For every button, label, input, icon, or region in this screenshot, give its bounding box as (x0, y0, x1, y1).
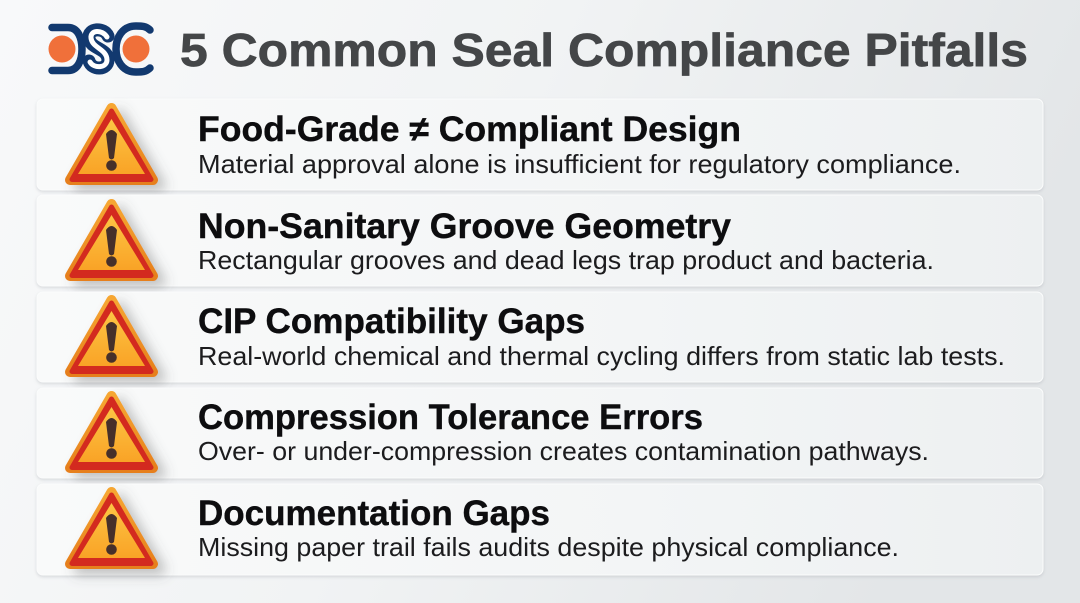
text: pitfall 3 description: Real-world chemical and thermal cycling differs from static lab tests. (198, 341, 1005, 371)
text: pitfall 4 description: Over- or under-compression creates contamination pathways. (198, 436, 929, 466)
icon: warning triangle 3 (70, 300, 153, 372)
heading: pitfall 2: Non-Sanitary Groove Geometry (198, 207, 732, 246)
heading: pitfall 4: Compression Tolerance Errors (198, 398, 703, 437)
text: pitfall 1 description: Material approval alone is insufficient for regulatory compliance. (198, 149, 961, 179)
icon: warning triangle 2 (70, 204, 153, 276)
panel: pitfall 1 (37, 99, 1043, 190)
icon: warning triangle 1 (70, 108, 153, 180)
text: pitfall 2 description: Rectangular grooves and dead legs trap product and bacteria. (198, 245, 934, 275)
text: pitfall 5 description: Missing paper trail fails audits despite physical compliance. (198, 532, 899, 562)
panel: pitfall 5 (37, 484, 1043, 575)
heading: pitfall 3: CIP Compatibility Gaps (198, 302, 585, 341)
title: 5 Common Seal Compliance Pitfalls (180, 24, 1028, 76)
panel: pitfall 3 (37, 292, 1043, 382)
icon: warning triangle 5 (70, 492, 153, 564)
icon: warning triangle 4 (70, 396, 153, 468)
heading: pitfall 1: Food-Grade ≠ Compliant Design (198, 110, 741, 149)
panel: pitfall 4 (37, 388, 1043, 478)
panel: pitfall 2 (37, 195, 1043, 286)
heading: pitfall 5: Documentation Gaps (198, 494, 550, 533)
logo (48, 26, 150, 72)
